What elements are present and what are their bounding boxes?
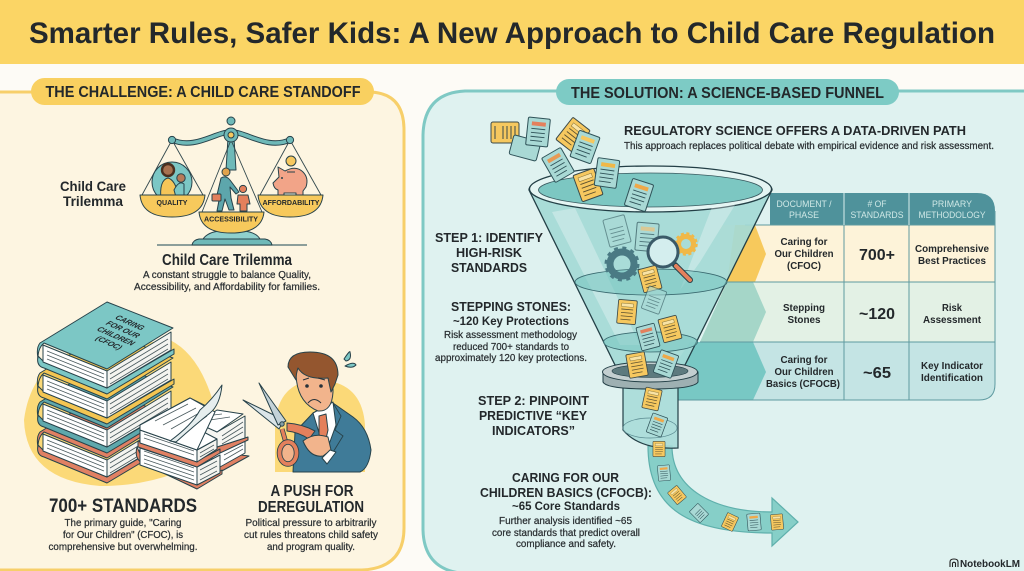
text: a push for deregulation: cut rules threatons child safety	[244, 529, 379, 541]
book cover title: CARING	[113, 313, 147, 332]
table row: CFOC: 700+	[859, 247, 895, 264]
text: a push for deregulation: Political pressure to arbitrarily	[246, 517, 377, 529]
text: stepping stones: reduced 700+ standards to	[453, 342, 569, 353]
pan: accessibility: ACCESSIBILITY	[204, 214, 258, 224]
table row: CFOCB: Key Indicator	[921, 360, 983, 372]
table row: CFOCB: Caring for	[780, 354, 828, 366]
icon: adult and child walking	[212, 168, 250, 211]
text: 700+ standards: comprehensive but overwhelming.	[48, 541, 198, 553]
table header: # OF	[868, 199, 887, 210]
pan: affordability	[258, 195, 323, 217]
table: standards by phase	[678, 193, 995, 400]
text: 700+ standards: for Our Children" (CFOC), is	[63, 529, 183, 541]
table row: CFOCB: ~65	[863, 365, 891, 382]
text: step 1: HIGH-RISK	[456, 245, 523, 260]
text: CFOCB core standards: CARING FOR OUR	[512, 470, 620, 485]
text: 700+ standards	[48, 496, 198, 553]
front lower book	[136, 441, 222, 489]
text: step 2	[478, 393, 589, 438]
icon: parent and child	[152, 162, 192, 202]
heading pill: the challenge: THE CHALLENGE: A CHILD CARE STANDOFF	[46, 84, 360, 101]
heading pill: the solution	[556, 79, 899, 105]
icon: stack of books	[24, 302, 216, 486]
front upper pages	[140, 398, 217, 462]
icon: funnel	[529, 166, 772, 365]
icon: cut books	[136, 385, 249, 489]
text: stepping stones: Risk assessment methodology	[444, 330, 577, 341]
icon: gears and magnifying glass	[606, 234, 696, 280]
table row: CFOC: (CFOC)	[787, 260, 821, 272]
table row: stepping stones	[783, 302, 981, 326]
text: stepping stones: approximately 120 key protections.	[435, 353, 587, 364]
icon: scissors	[243, 383, 315, 464]
table header: PHASE	[789, 210, 819, 221]
side label: child care trilemma	[60, 178, 126, 209]
table row: stepping stones: Stepping	[783, 302, 825, 314]
panel: the challenge	[0, 78, 404, 570]
table row: CFOC: Comprehensive	[915, 243, 989, 255]
table row: CFOC: Best Practices	[918, 255, 986, 267]
icon: worried politician with scissors	[243, 352, 371, 472]
text: child care trilemma	[134, 252, 320, 293]
header banner	[0, 0, 1024, 64]
funnel band arrows	[678, 225, 766, 400]
text: step 2: INDICATORS”	[492, 423, 575, 438]
text: CFOCB core standards: core standards that predict overall	[492, 528, 640, 539]
book cover title: (CFOC)	[94, 334, 125, 352]
table header	[776, 199, 986, 221]
text: 700+ standards: 700+ STANDARDS	[49, 496, 197, 517]
text: step 1: STANDARDS	[451, 260, 527, 275]
text: stepping stones	[435, 299, 587, 364]
text: 700+ standards: The primary guide, "Caring	[64, 517, 182, 529]
panel: the solution	[423, 79, 1024, 571]
side label: child care trilemma: Trilemma	[63, 193, 123, 209]
arrow: curved output tube	[648, 446, 798, 546]
text: a push for deregulation: A PUSH FOR	[270, 483, 354, 500]
book cover title: FOR OUR	[104, 319, 142, 340]
table row: CFOCB	[766, 354, 983, 390]
table row: stepping stones: ~120	[859, 306, 895, 323]
pan: quality	[140, 195, 205, 217]
text: step 2: PREDICTIVE “KEY	[479, 408, 587, 423]
table header: DOCUMENT /	[776, 199, 832, 210]
pan: accessibility	[199, 212, 264, 233]
icon: piggy bank	[273, 156, 307, 196]
table header: METHODOLOGY	[918, 210, 986, 221]
heading pill: the solution: THE SOLUTION: A SCIENCE-BASED FUNNEL	[571, 85, 884, 102]
table row: stepping stones: Stones	[788, 314, 821, 326]
text: step 1	[435, 230, 543, 275]
icon: balance scale	[140, 117, 323, 245]
table row: CFOCB: Identification	[921, 372, 983, 384]
back stack of pages	[197, 410, 249, 472]
text: step 2: STEP 2: PINPOINT	[478, 393, 589, 408]
book cover title	[91, 307, 147, 358]
text: regulatory science intro	[624, 124, 994, 152]
table row: stepping stones: Risk	[942, 302, 962, 314]
table header: STANDARDS	[850, 210, 904, 221]
text: step 1: STEP 1: IDENTIFY	[435, 230, 543, 245]
text: CFOCB core standards: CHILDREN BASICS (CFOCB):	[480, 485, 652, 500]
icon: funnel spout	[623, 385, 678, 448]
text: regulatory science intro: REGULATORY SCIENCE OFFERS A DATA-DRIVEN PATH	[624, 124, 966, 138]
table row: CFOCB: Our Children	[774, 366, 834, 378]
side label: child care trilemma: Child Care	[60, 178, 126, 194]
table row: CFOC: Our Children	[774, 248, 834, 260]
icons: falling documents	[491, 117, 784, 532]
text: child care trilemma: Accessibility, and Affordability for families.	[134, 281, 320, 293]
icon: collar ring	[602, 362, 698, 389]
pan: affordability: AFFORDABILITY	[262, 198, 320, 207]
text: child care trilemma: A constant struggle to balance Quality,	[143, 269, 311, 281]
turned page	[170, 385, 222, 442]
table row: CFOC	[774, 236, 989, 272]
text: a push for deregulation: DEREGULATION	[258, 499, 364, 516]
text: a push for deregulation: and program quality.	[267, 541, 355, 553]
pan: quality: QUALITY	[156, 198, 188, 207]
text: regulatory science intro: This approach replaces political debate with empirical evidence and risk assessment.	[624, 141, 994, 152]
text: stepping stones: STEPPING STONES:	[451, 299, 571, 314]
heading pill: the challenge	[31, 78, 374, 105]
table row: CFOCB: Basics (CFOCB)	[766, 378, 840, 390]
text: CFOCB core standards: ~65 Core Standards	[512, 499, 620, 513]
text: child care trilemma: Child Care Trilemma	[162, 252, 292, 269]
book cover title: CHILDREN	[95, 325, 137, 347]
text: stepping stones: ~120 Key Protections	[453, 314, 569, 328]
text: CFOCB core standards	[480, 470, 652, 550]
text: CFOCB core standards: compliance and safety.	[516, 539, 616, 550]
logo: NotebookLM: NotebookLM	[960, 559, 1020, 570]
table row: CFOC: Caring for	[780, 236, 828, 248]
text: a push for deregulation	[244, 483, 379, 553]
title: Smarter Rules, Safer Kids: A New Approach to Child Care Regulation	[29, 17, 995, 50]
table row: stepping stones: Assessment	[923, 314, 981, 326]
text: CFOCB core standards: Further analysis identified ~65	[499, 516, 632, 527]
table header: PRIMARY	[932, 199, 973, 210]
